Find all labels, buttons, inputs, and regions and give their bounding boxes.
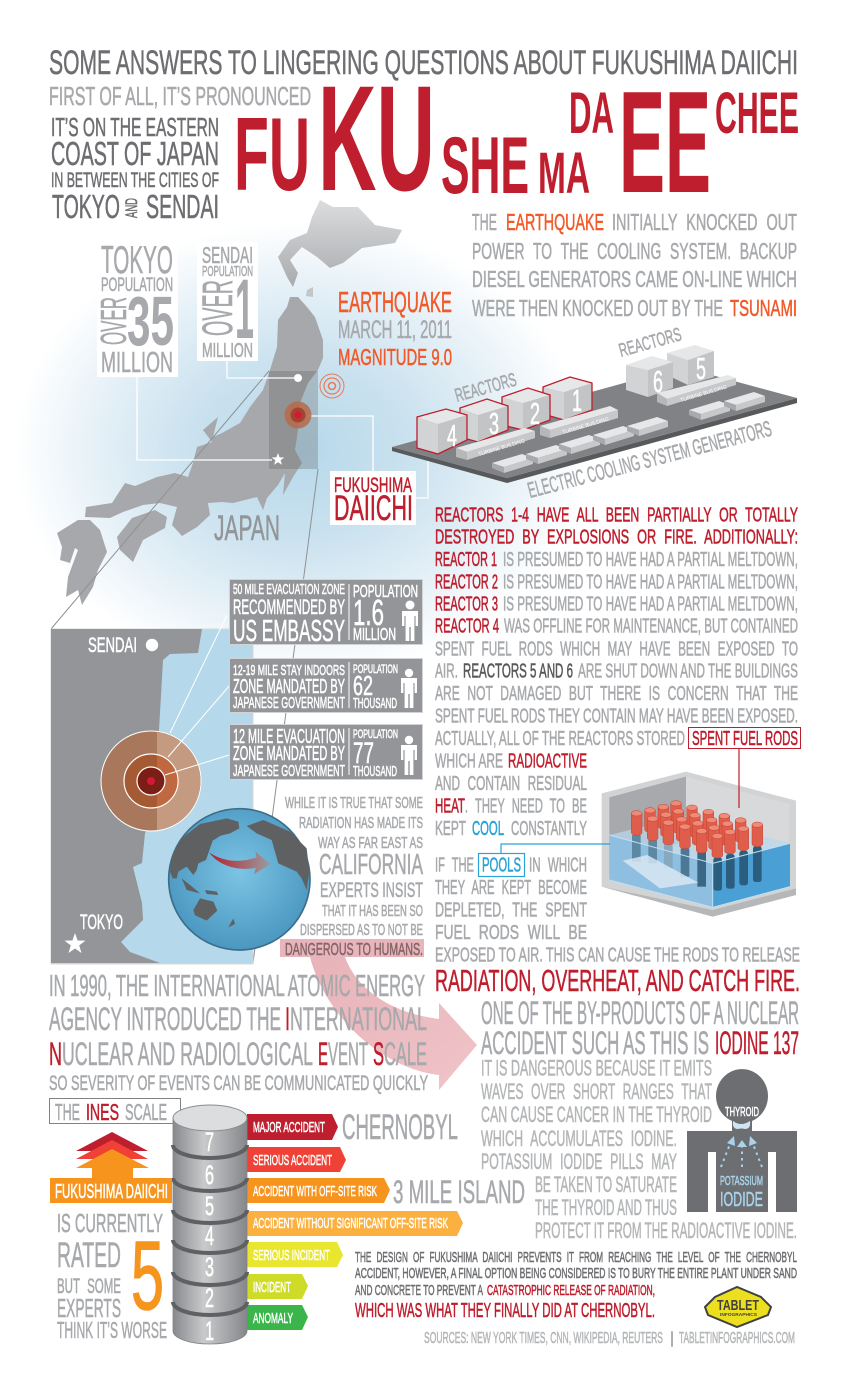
INES cylinder: 7: [205, 1127, 214, 1157]
label: reactors 5-6: REACTORS: [617, 324, 684, 362]
radiation text: WHILE IT IS TRUE THAT SOME: [285, 795, 423, 812]
spent fuel text: DEPLETED, THE SPENT: [435, 900, 587, 922]
sendai marker: SENDAI: [88, 633, 137, 657]
turbine building, reactors 5-6: TURBINE BUILDING: [680, 385, 728, 404]
pointer: spent fuel rods: [738, 749, 740, 808]
earthquake facts: [338, 287, 452, 370]
label: reactors 1-4: REACTORS: [453, 370, 519, 407]
reactor status text: AIR.: [435, 660, 458, 682]
INES introduction text: IN 1990, THE INTERNATIONAL ATOMIC ENERGY: [49, 969, 425, 1003]
panel: 50 mile zone: 50 MILE EVACUATION ZONE: [233, 582, 345, 598]
INES scale heading: INES: [86, 1099, 119, 1125]
panel: 12 mile zone: POPULATION: [353, 728, 398, 741]
spent fuel text: IF THE: [435, 855, 474, 877]
thyroid figure: [687, 1069, 797, 1212]
iodine text: [481, 995, 799, 1243]
label: Fukushima Daiichi: DAIICHI: [334, 489, 413, 528]
earthquake facts: MAGNITUDE 9.0: [338, 344, 452, 370]
pronunciation letters: [234, 54, 799, 223]
callout: Tokyo population: [93, 239, 178, 379]
label: Japan: JAPAN: [214, 509, 280, 548]
marker: Sendai dot: [294, 374, 302, 382]
callout: Sendai population: SENDAI: [202, 242, 253, 268]
reactor status text: REACTOR 2: [435, 571, 498, 593]
INES introduction text: VENT: [328, 1036, 368, 1072]
marker: plant target: [284, 402, 312, 428]
location text block: IT’S ON THE EASTERN: [51, 112, 219, 142]
logo: Tablet Infographics: [705, 1287, 771, 1327]
pronunciation letters: SHE: [441, 121, 529, 211]
location text block: TOKYO: [52, 188, 120, 225]
radiation text: [285, 795, 423, 939]
panel: 50 mile zone: POPULATION: [353, 581, 418, 601]
earthquake explanation text: TSUNAMI: [730, 295, 797, 321]
iodine text: THE THYROID AND THUS: [535, 1195, 677, 1220]
rating text: BUT SOME: [57, 1274, 121, 1298]
spent fuel text: IN WHICH: [529, 855, 587, 877]
plant design text: CATASTROPHIC RELEASE OF RADIATION,: [487, 1283, 655, 1299]
globe: [169, 809, 310, 950]
reactor 1: [543, 377, 592, 420]
plant diagram: [392, 324, 797, 503]
INES introduction text: S: [373, 1036, 384, 1072]
INES introduction text: E: [318, 1036, 328, 1072]
earthquake facts: EARTHQUAKE: [338, 287, 452, 319]
INES scale heading: SCALE: [125, 1099, 167, 1125]
continents: [170, 818, 309, 927]
INES scale heading: [50, 1098, 180, 1125]
map of Japan: [57, 200, 402, 605]
iodine text: WHICH ACCUMULATES IODINE.: [481, 1126, 677, 1151]
current arrow: [623, 855, 698, 888]
iodine text: POTASSIUM IODIDE PILLS MAY: [481, 1149, 677, 1174]
panel: 50 mile zone: MILLION: [353, 624, 396, 644]
panel: 12 mile zone: ZONE MANDATED BY: [233, 743, 345, 765]
pointer: pools: [501, 844, 610, 853]
spent fuel text: WHICH ARE: [435, 750, 503, 772]
INES introduction text: I: [285, 1001, 290, 1037]
highlight: dangerous to humans: [280, 939, 424, 959]
spent fuel text: THEY ARE KEPT BECOME: [435, 877, 587, 899]
turbine building, reactors 5-6: [657, 375, 736, 406]
INES introduction text: AGENCY INTRODUCED THE: [49, 1001, 281, 1037]
location text block: SENDAI: [146, 188, 219, 225]
water edges: [609, 835, 790, 907]
callout: Sendai population: MILLION: [202, 340, 253, 362]
panel: 50 mile zone: RECOMMENDED BY: [233, 595, 345, 619]
radiation text: CALIFORNIA: [319, 849, 423, 881]
spent fuel text: FUEL RODS WILL BE: [435, 922, 587, 944]
level 5: [247, 1178, 390, 1203]
platform: [392, 367, 797, 483]
reactor status text: [435, 505, 798, 750]
location text block: COAST OF JAPAN: [51, 135, 219, 172]
icon: earthquake epicentre rings: [320, 374, 344, 398]
sources: |: [670, 1330, 674, 1347]
spent fuel text: KEPT: [435, 818, 466, 840]
infographic canvas: 1: [235, 262, 254, 356]
icon: absorption arrows: [721, 1144, 762, 1167]
INES cylinder: 6: [205, 1160, 214, 1190]
earthquake facts: MARCH 11, 2011: [338, 316, 452, 344]
zone pointers: [165, 615, 230, 775]
iodine text: BE TAKEN TO SATURATE: [535, 1172, 677, 1197]
reactor 5: 5: [696, 351, 706, 386]
callout: Sendai population: OVER: [194, 280, 242, 336]
submerged rods: [632, 835, 762, 891]
marker: Tokyo star: [272, 453, 284, 465]
tokyo marker: TOKYO: [80, 910, 123, 934]
panel: 12 mile zone: JAPANESE GOVERNMENT: [233, 763, 345, 780]
callout: Tokyo population: MILLION: [101, 347, 173, 379]
INES introduction text: CALE: [384, 1036, 427, 1072]
inset highlight rectangle: [269, 371, 318, 469]
callout: Tokyo population: OVER: [93, 297, 134, 345]
generators: [492, 392, 765, 473]
drift arrow: [209, 852, 271, 874]
spent fuel text: RADIOACTIVE: [508, 750, 587, 772]
reactor status text: REACTOR 1: [435, 549, 497, 571]
label: Fukushima Daiichi: FUKUSHIMA: [334, 473, 412, 497]
rating text: IS CURRENTLY: [57, 1208, 163, 1238]
INES scale heading: THE: [55, 1099, 80, 1125]
rating text: [57, 1208, 167, 1343]
pronunciation letters: FU: [234, 97, 310, 213]
pool walls: [602, 772, 796, 917]
reactor status text: REACTORS 5 AND 6: [463, 660, 573, 682]
spent fuel text: .: [465, 795, 468, 817]
level 1: ANOMALY: [253, 1311, 293, 1327]
land: [51, 629, 202, 963]
panel: 12 mile zone: THOUSAND: [353, 764, 397, 780]
location text block: AND: [122, 198, 141, 218]
panel: 12-19 mile zone: [230, 658, 422, 712]
reactor 3: [460, 399, 508, 442]
callout: Tokyo population: 35: [127, 282, 174, 360]
reactor status text: REACTOR 4: [435, 616, 499, 638]
level 7: MAJOR ACCIDENT: [253, 1120, 325, 1136]
level 2: [247, 1274, 308, 1299]
reactor 4: [417, 409, 467, 454]
INES cylinder: 1: [205, 1316, 214, 1346]
reactor 3: 3: [489, 406, 499, 441]
label: Fukushima Daiichi: [330, 471, 416, 528]
callout: pools: [478, 854, 524, 877]
reactor 2: 2: [530, 396, 540, 431]
level 5: ACCIDENT WITH OFF-SITE RISK: [253, 1184, 377, 1200]
radiation text: DISPERSED AS TO NOT BE: [300, 922, 423, 939]
level 6: SERIOUS ACCIDENT: [253, 1152, 332, 1169]
level 7: [247, 1114, 338, 1140]
evacuation zone circles: [101, 731, 201, 831]
logo: Tablet Infographics: INFOGRAPHICS: [720, 1312, 757, 1317]
panel: 50 mile zone: US EMBASSY: [233, 614, 345, 648]
turbine building, reactors 1-2: [540, 406, 618, 438]
highlight: dangerous to humans: DANGEROUS TO HUMANS.: [285, 939, 423, 959]
label: 3 Mile Island: 3 MILE ISLAND: [393, 1174, 525, 1210]
zoom guide lines: [51, 371, 318, 963]
earthquake explanation text: [472, 209, 797, 321]
reactor 1: 1: [572, 383, 582, 418]
callout: spent fuel rods: [688, 728, 800, 750]
panel: 12-19 mile zone: JAPANESE GOVERNMENT: [233, 695, 345, 712]
reactor 6: 6: [653, 364, 663, 399]
callout: Tokyo population: POPULATION: [101, 275, 173, 296]
plant design text: AND CONCRETE TO PREVENT A: [355, 1283, 483, 1299]
icon: thyroid gland: [733, 1121, 750, 1129]
fuel rods: [631, 801, 763, 858]
plant design text: [355, 1250, 797, 1322]
rating text: RATED: [57, 1236, 121, 1275]
label: Chernobyl: CHERNOBYL: [342, 1108, 458, 1147]
INES level arrows: [247, 1114, 463, 1330]
Fukushima rating arrow: [50, 1132, 172, 1203]
Fukushima rating arrow: FUKUSHIMA DAIICHI: [55, 1181, 168, 1203]
reactor 5: [667, 345, 714, 386]
pink arrow: [310, 957, 477, 1090]
INES introduction text: UCLEAR AND RADIOLOGICAL: [62, 1036, 313, 1072]
pronunciation intro: FIRST OF ALL, IT’S PRONOUNCED: [49, 81, 311, 111]
radiation text: RADIATION HAS MADE ITS: [299, 815, 423, 832]
panel: 12 mile zone: 77: [353, 737, 374, 770]
level 3: [247, 1242, 343, 1267]
spent fuel text: AND CONTAIN RESIDUAL: [435, 773, 587, 795]
INES introduction text: SO SEVERITY OF EVENTS CAN BE COMMUNICATED QUICKLY: [49, 1071, 428, 1095]
map detail panel: [51, 615, 253, 964]
level 6: [247, 1147, 346, 1172]
pronunciation letters: KU: [318, 54, 435, 222]
spent fuel text: CONSTANTLY: [511, 818, 587, 840]
spent fuel text: [435, 750, 800, 967]
spent fuel text: COOL: [472, 818, 504, 840]
pronunciation letters: DA: [569, 81, 614, 146]
turbine building, reactors 1-2: TURBINE BUILDING: [562, 417, 610, 436]
spent fuel text: HEAT: [435, 795, 465, 817]
water: [609, 816, 790, 907]
callout: Sendai population: POPULATION: [202, 264, 253, 280]
turbine building, reactors 3-4: TURBINE BUILDING: [478, 439, 526, 458]
INES introduction text: NTERNATIONAL: [290, 1001, 427, 1037]
reactor status text: REACTOR 3: [435, 594, 498, 616]
INES cylinder: 2: [205, 1283, 214, 1313]
INES cylinder: 5: [205, 1191, 214, 1221]
level 3: SERIOUS INCIDENT: [253, 1248, 330, 1264]
panel: 12-19 mile zone: 62: [353, 670, 373, 701]
panel: 12 mile zone: [230, 724, 422, 780]
pronunciation letters: EE: [619, 61, 711, 223]
pronunciation letters: MA: [538, 141, 590, 206]
level 4: [247, 1211, 463, 1236]
callout: Sendai population: [194, 242, 258, 362]
panel: 12-19 mile zone: POPULATION: [353, 663, 398, 676]
rating text: THINK IT’S WORSE: [57, 1317, 167, 1343]
rating text: EXPERTS: [57, 1293, 121, 1323]
label: potassium iodide: [720, 1173, 763, 1211]
panel: 50 mile zone: [230, 580, 422, 648]
callout: Tokyo population: TOKYO: [101, 239, 173, 282]
location text block: [51, 112, 219, 225]
INES introduction text: N: [49, 1036, 62, 1072]
label: potassium iodide: IODIDE: [720, 1189, 763, 1211]
reactor 2: [502, 388, 550, 431]
INES cylinder: [173, 1105, 247, 1346]
panel: 12-19 mile zone: ZONE MANDATED BY: [233, 676, 345, 698]
INES cylinder: 4: [205, 1221, 214, 1251]
INES cylinder: 3: [205, 1252, 214, 1282]
map connector lines: [137, 361, 428, 498]
earthquake explanation text: THE: [472, 209, 497, 235]
reactor 4: 4: [447, 418, 457, 453]
turbine building, reactors 3-4: [456, 428, 535, 460]
panel: 12-19 mile zone: 12-19 MILE STAY INDOORS: [233, 663, 345, 679]
logo: Tablet Infographics: TABLET: [717, 1298, 759, 1314]
water: [51, 629, 253, 964]
label: thyroid: THYROID: [725, 1104, 759, 1119]
panel: 12-19 mile zone: THOUSAND: [353, 696, 397, 712]
radiation text: WAY AS FAR EAST AS: [318, 835, 423, 852]
arrowheads: [727, 1136, 757, 1147]
location text block: IN BETWEEN THE CITIES OF: [51, 168, 219, 192]
radiation text: THAT IT HAS BEEN SO: [322, 903, 423, 920]
reactor 6: [626, 356, 673, 399]
level 1: [247, 1305, 308, 1330]
spent fuel text: THEY NEED TO BE: [475, 795, 587, 817]
panel: 50 mile zone: 1.6: [353, 592, 384, 633]
level 2: INCIDENT: [253, 1280, 291, 1296]
level 4: ACCIDENT WITHOUT SIGNIFICANT OFF-SITE RISK: [253, 1216, 448, 1232]
panel: 12 mile zone: 12 MILE EVACUATION: [233, 726, 345, 748]
label: potassium iodide: POTASSIUM: [720, 1173, 763, 1188]
earthquake explanation text: EARTHQUAKE: [506, 209, 604, 235]
callout: pools: POOLS: [482, 855, 521, 877]
tokyo marker: [64, 910, 123, 953]
rating text: 5: [131, 1221, 164, 1330]
INES introduction text: [49, 969, 428, 1095]
spent fuel pool diagram: [602, 772, 796, 917]
radiation text: EXPERTS INSIST: [320, 878, 423, 902]
